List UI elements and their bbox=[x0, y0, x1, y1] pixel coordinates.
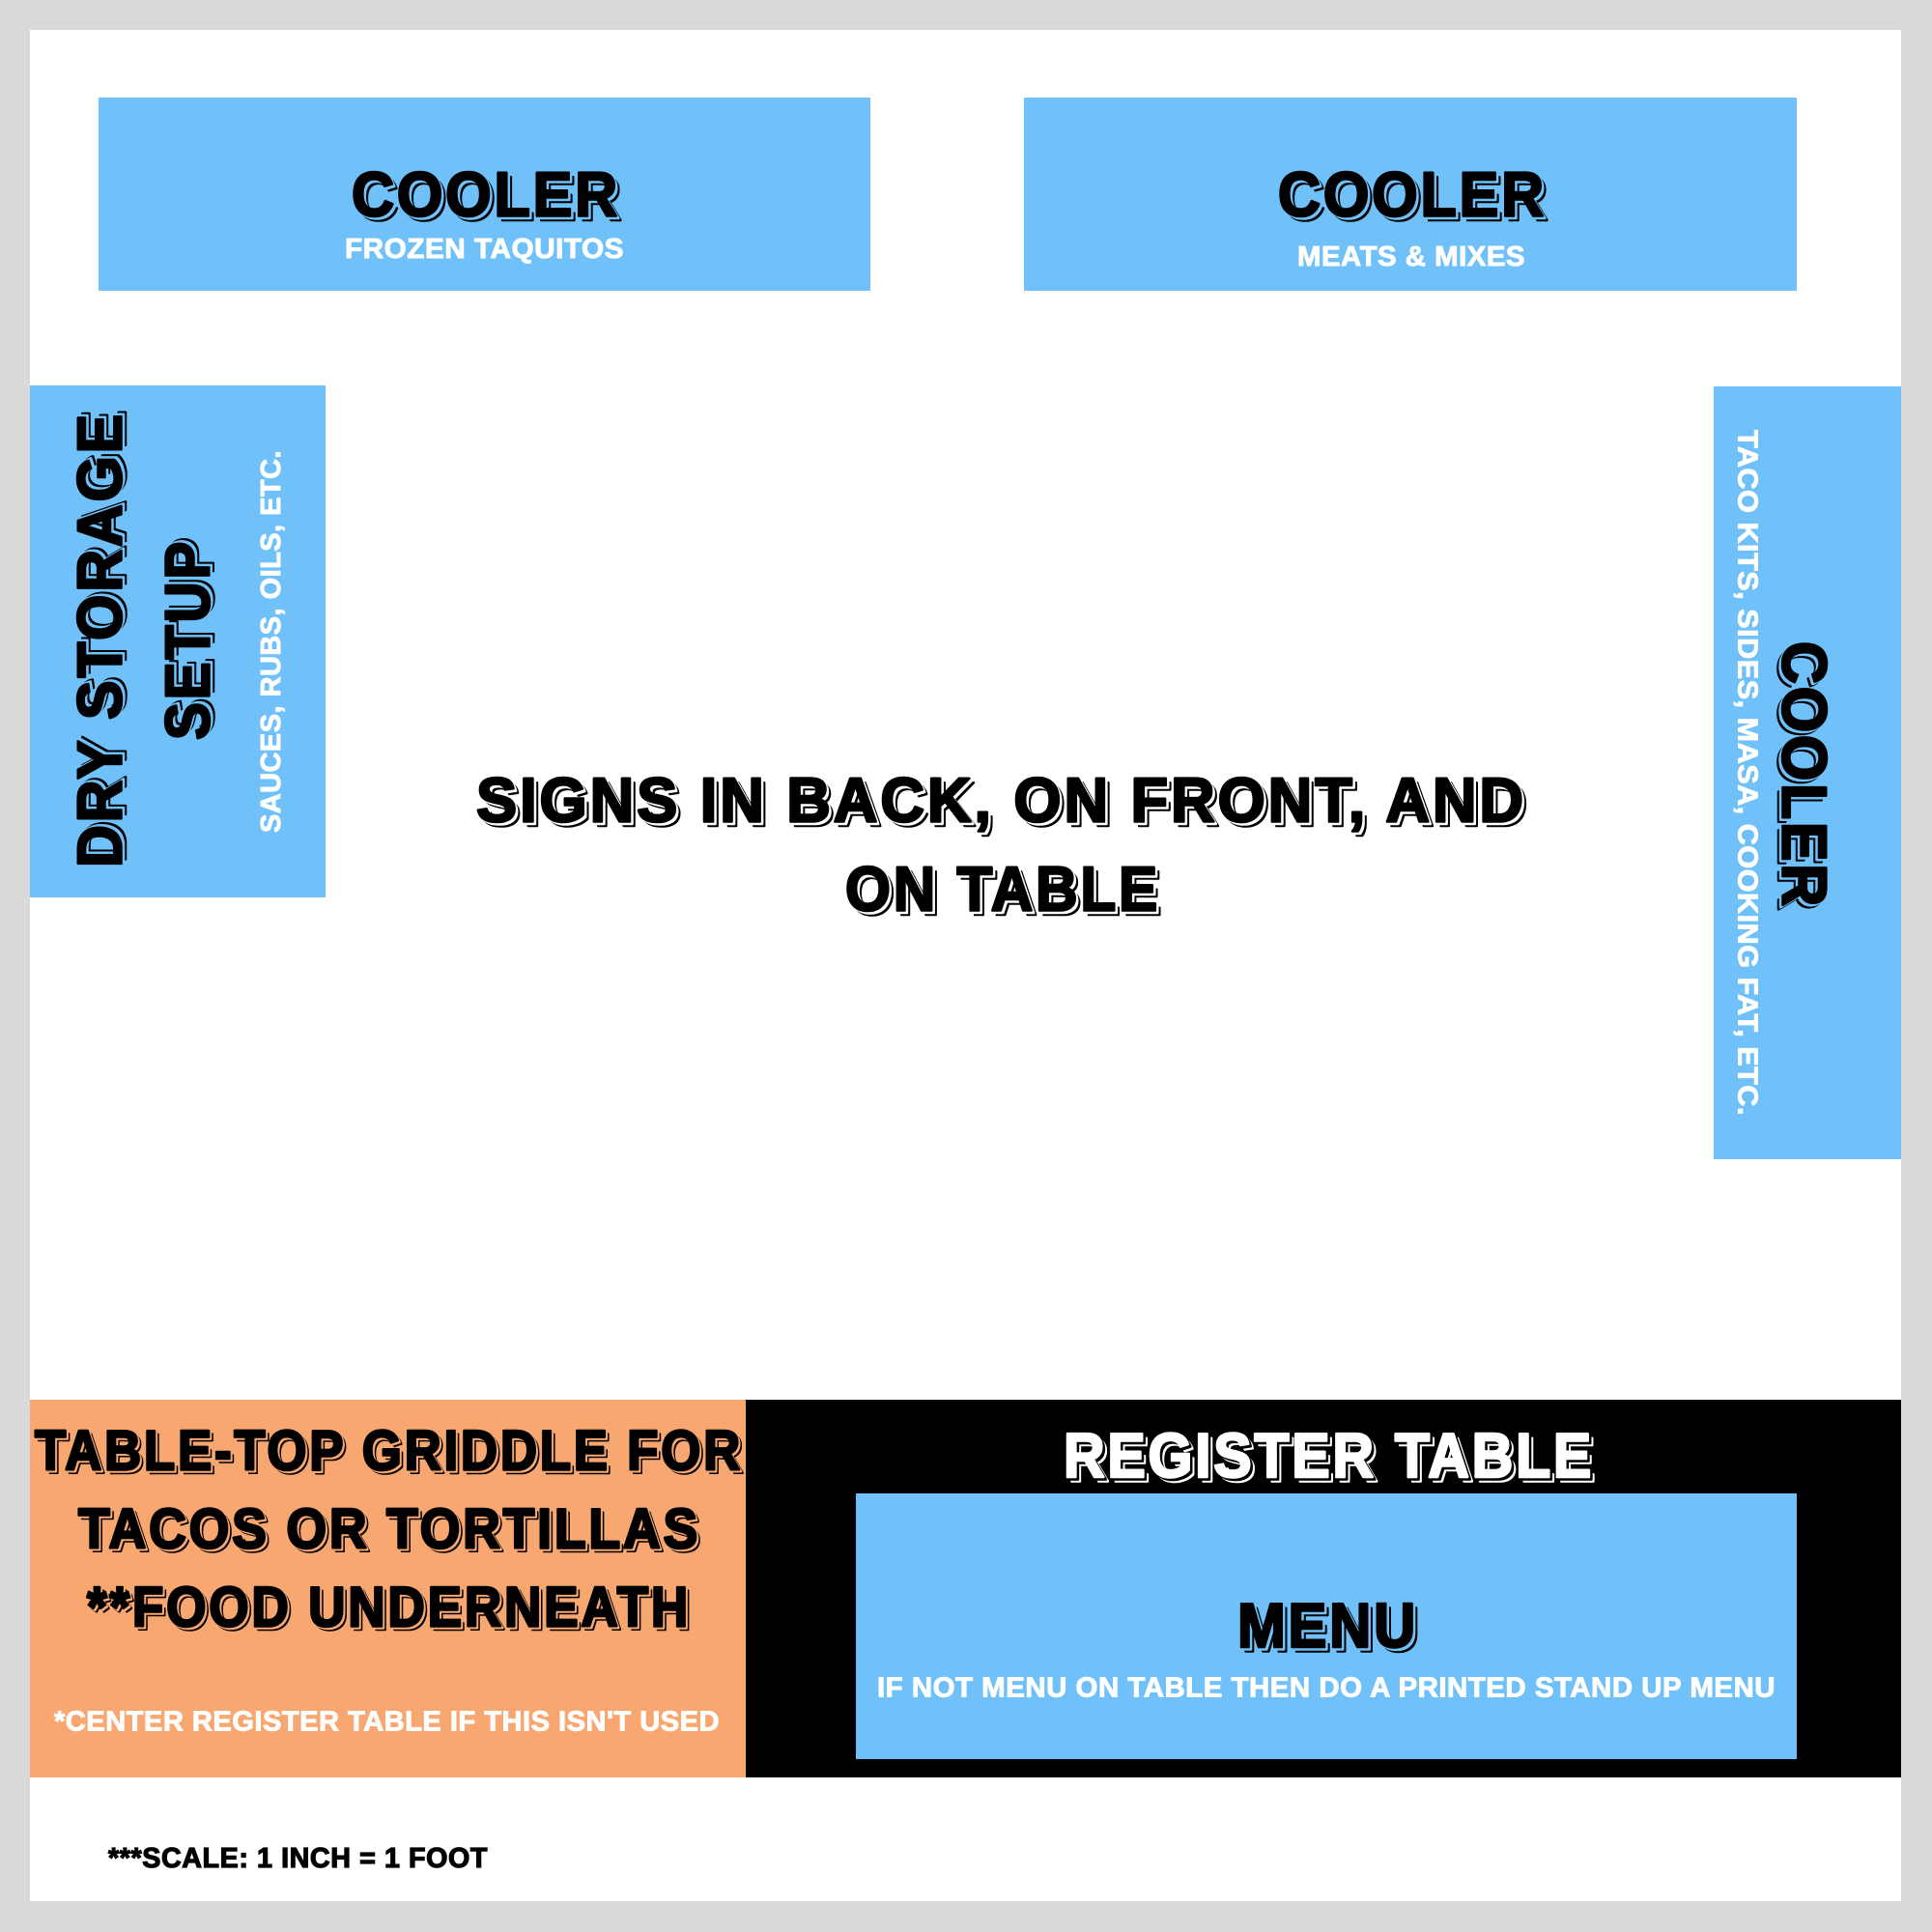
panel: griddle bbox=[30, 1400, 746, 1777]
text: frozen taquitos: FROZEN TAQUITOS bbox=[345, 234, 624, 265]
text: taco kits, sides: TACO KITS, SIDES, MASA, COOKING FAT, ETC. bbox=[1731, 430, 1762, 1116]
heading: cooler: COOLER bbox=[1278, 158, 1547, 230]
text: printed menu note: IF NOT MENU ON TABLE THEN DO A PRINTED STAND UP MENU bbox=[877, 1673, 1776, 1704]
panel: cooler taco kits bbox=[1714, 386, 1901, 1159]
panel: cooler frozen taquitos bbox=[99, 98, 870, 291]
heading: register table: REGISTER TABLE bbox=[1064, 1420, 1594, 1491]
heading: cooler: COOLER bbox=[1770, 641, 1839, 909]
panel: menu bbox=[856, 1493, 1797, 1759]
heading: griddle line three: **FOOD UNDERNEATH bbox=[87, 1577, 691, 1638]
text: sauces, rubs, oils: SAUCES, RUBS, OILS, ETC. bbox=[256, 450, 287, 833]
panel: dry storage setup bbox=[30, 385, 326, 897]
text: meats and mixes: MEATS & MIXES bbox=[1297, 242, 1525, 272]
panel: cooler meats and mixes bbox=[1024, 98, 1797, 291]
heading: dry storage: DRY STORAGE bbox=[64, 412, 135, 867]
heading: cooler: COOLER bbox=[352, 158, 620, 230]
heading: griddle line two: TACOS OR TORTILLAS bbox=[78, 1497, 700, 1561]
heading: setup: SETUP bbox=[153, 539, 222, 740]
callout: signs: SIGNS IN BACK, ON FRONT, AND bbox=[476, 765, 1526, 835]
panel: register table bbox=[746, 1400, 1901, 1777]
note: scale: ***SCALE: 1 INCH = 1 FOOT bbox=[108, 1843, 488, 1874]
heading: menu: MENU bbox=[1237, 1590, 1418, 1661]
callout: second line: ON TABLE bbox=[845, 854, 1160, 923]
heading: griddle line one: TABLE-TOP GRIDDLE FOR bbox=[35, 1420, 743, 1482]
callout: signs bbox=[476, 765, 1526, 923]
note: center register table: *CENTER REGISTER TABLE IF THIS ISN'T USED bbox=[54, 1706, 720, 1737]
